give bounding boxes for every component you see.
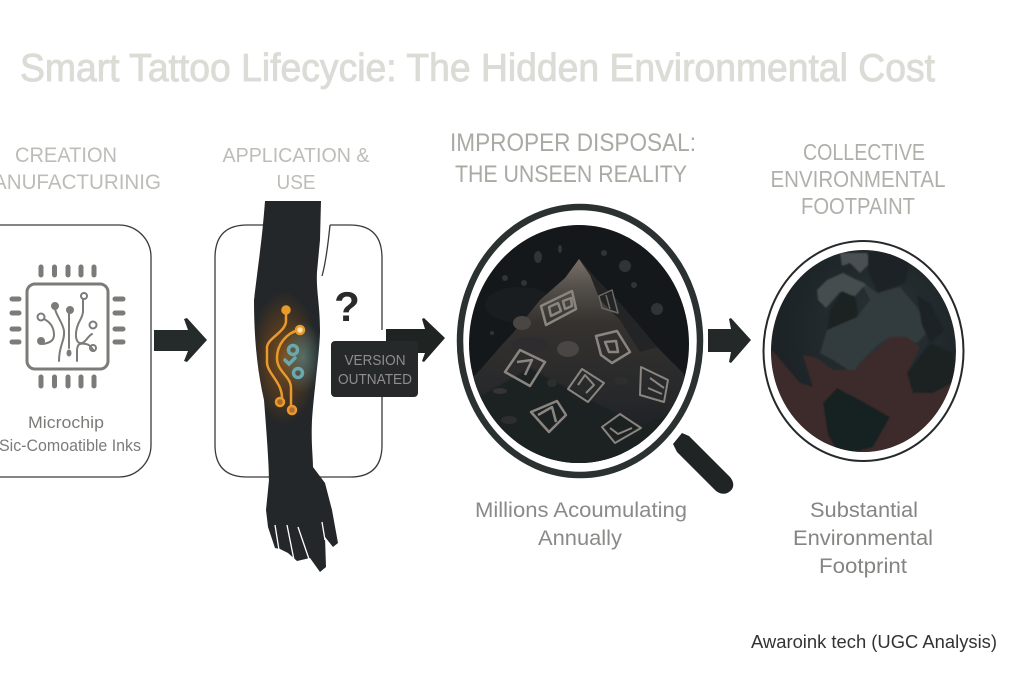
heading: creation manufacturing: CREATION — [15, 144, 117, 167]
discarded tattoo chips — [505, 290, 668, 443]
caption: millions accumulating: Millions Acoumulating — [475, 498, 687, 522]
caption: substantial environmental footprint: Environmental — [793, 526, 933, 550]
caption: millions accumulating — [475, 498, 687, 550]
tattoo glow — [256, 298, 319, 418]
heading: collective environmental footprint — [770, 139, 946, 219]
heading: application and use — [222, 144, 370, 194]
globe body — [771, 250, 956, 452]
heading: improper disposal: IMPROPER DISPOSAL: — [450, 129, 696, 157]
badge: version outdated: OUTNATED — [338, 372, 412, 388]
heading: collective environmental footprint: ENVIRONMENTAL — [770, 166, 946, 192]
title: Smart Tattoo Lifecycie: The Hidden Environmental Cost — [20, 47, 935, 90]
heading: application and use: USE — [276, 171, 316, 194]
icon: magnifier over e-waste pile — [460, 207, 733, 494]
globe ring — [764, 241, 964, 461]
shadowed right side of pile — [579, 259, 657, 352]
icon: arm with smart tattoo — [250, 201, 338, 572]
rust red land — [771, 336, 952, 452]
text: card caption: Microchip — [28, 414, 104, 432]
arrow: application to disposal — [386, 318, 445, 362]
rubble pile — [473, 259, 685, 463]
heading: application and use: APPLICATION & — [222, 144, 370, 167]
panel: application card — [215, 225, 382, 477]
arrow: disposal to footprint — [708, 318, 751, 363]
finger gaps — [275, 522, 325, 562]
heading: improper disposal — [450, 129, 696, 188]
caption: substantial environmental footprint: Substantial — [810, 498, 918, 522]
lens scene — [465, 220, 695, 470]
magnifier handle — [673, 433, 733, 494]
caption: millions accumulating: Annually — [538, 526, 622, 550]
arrow: creation to application — [154, 318, 207, 362]
dark continents — [907, 343, 958, 393]
caption: substantial environmental footprint — [793, 498, 933, 578]
source credit: Awaroink tech (UGC Analysis) — [751, 632, 997, 652]
caption: substantial environmental footprint: Footprint — [819, 554, 907, 578]
dark land — [827, 291, 858, 330]
icon: polluted globe — [764, 241, 965, 461]
grey land — [820, 285, 926, 370]
tattoo teal nodes — [285, 346, 302, 378]
heading: collective environmental footprint: COLLECTIVE — [803, 139, 925, 165]
badge: version outdated — [331, 341, 418, 397]
floating debris — [490, 245, 663, 335]
icon: question mark: ? — [334, 283, 360, 330]
heading: creation manufacturing — [0, 144, 161, 194]
panel: creation card — [0, 225, 151, 477]
text: card caption: Sic-Comoatible Inks — [0, 437, 141, 455]
lower dark slope — [480, 368, 668, 463]
badge: version outdated: VERSION — [344, 353, 406, 369]
heading: improper disposal: THE UNSEEN REALITY — [455, 161, 687, 188]
heading: collective environmental footprint: FOOTPAINT — [801, 193, 915, 219]
text: card caption — [0, 414, 141, 455]
magnifier ring — [460, 207, 700, 475]
tattoo circuit — [267, 306, 304, 414]
icon: microchip — [12, 267, 123, 386]
